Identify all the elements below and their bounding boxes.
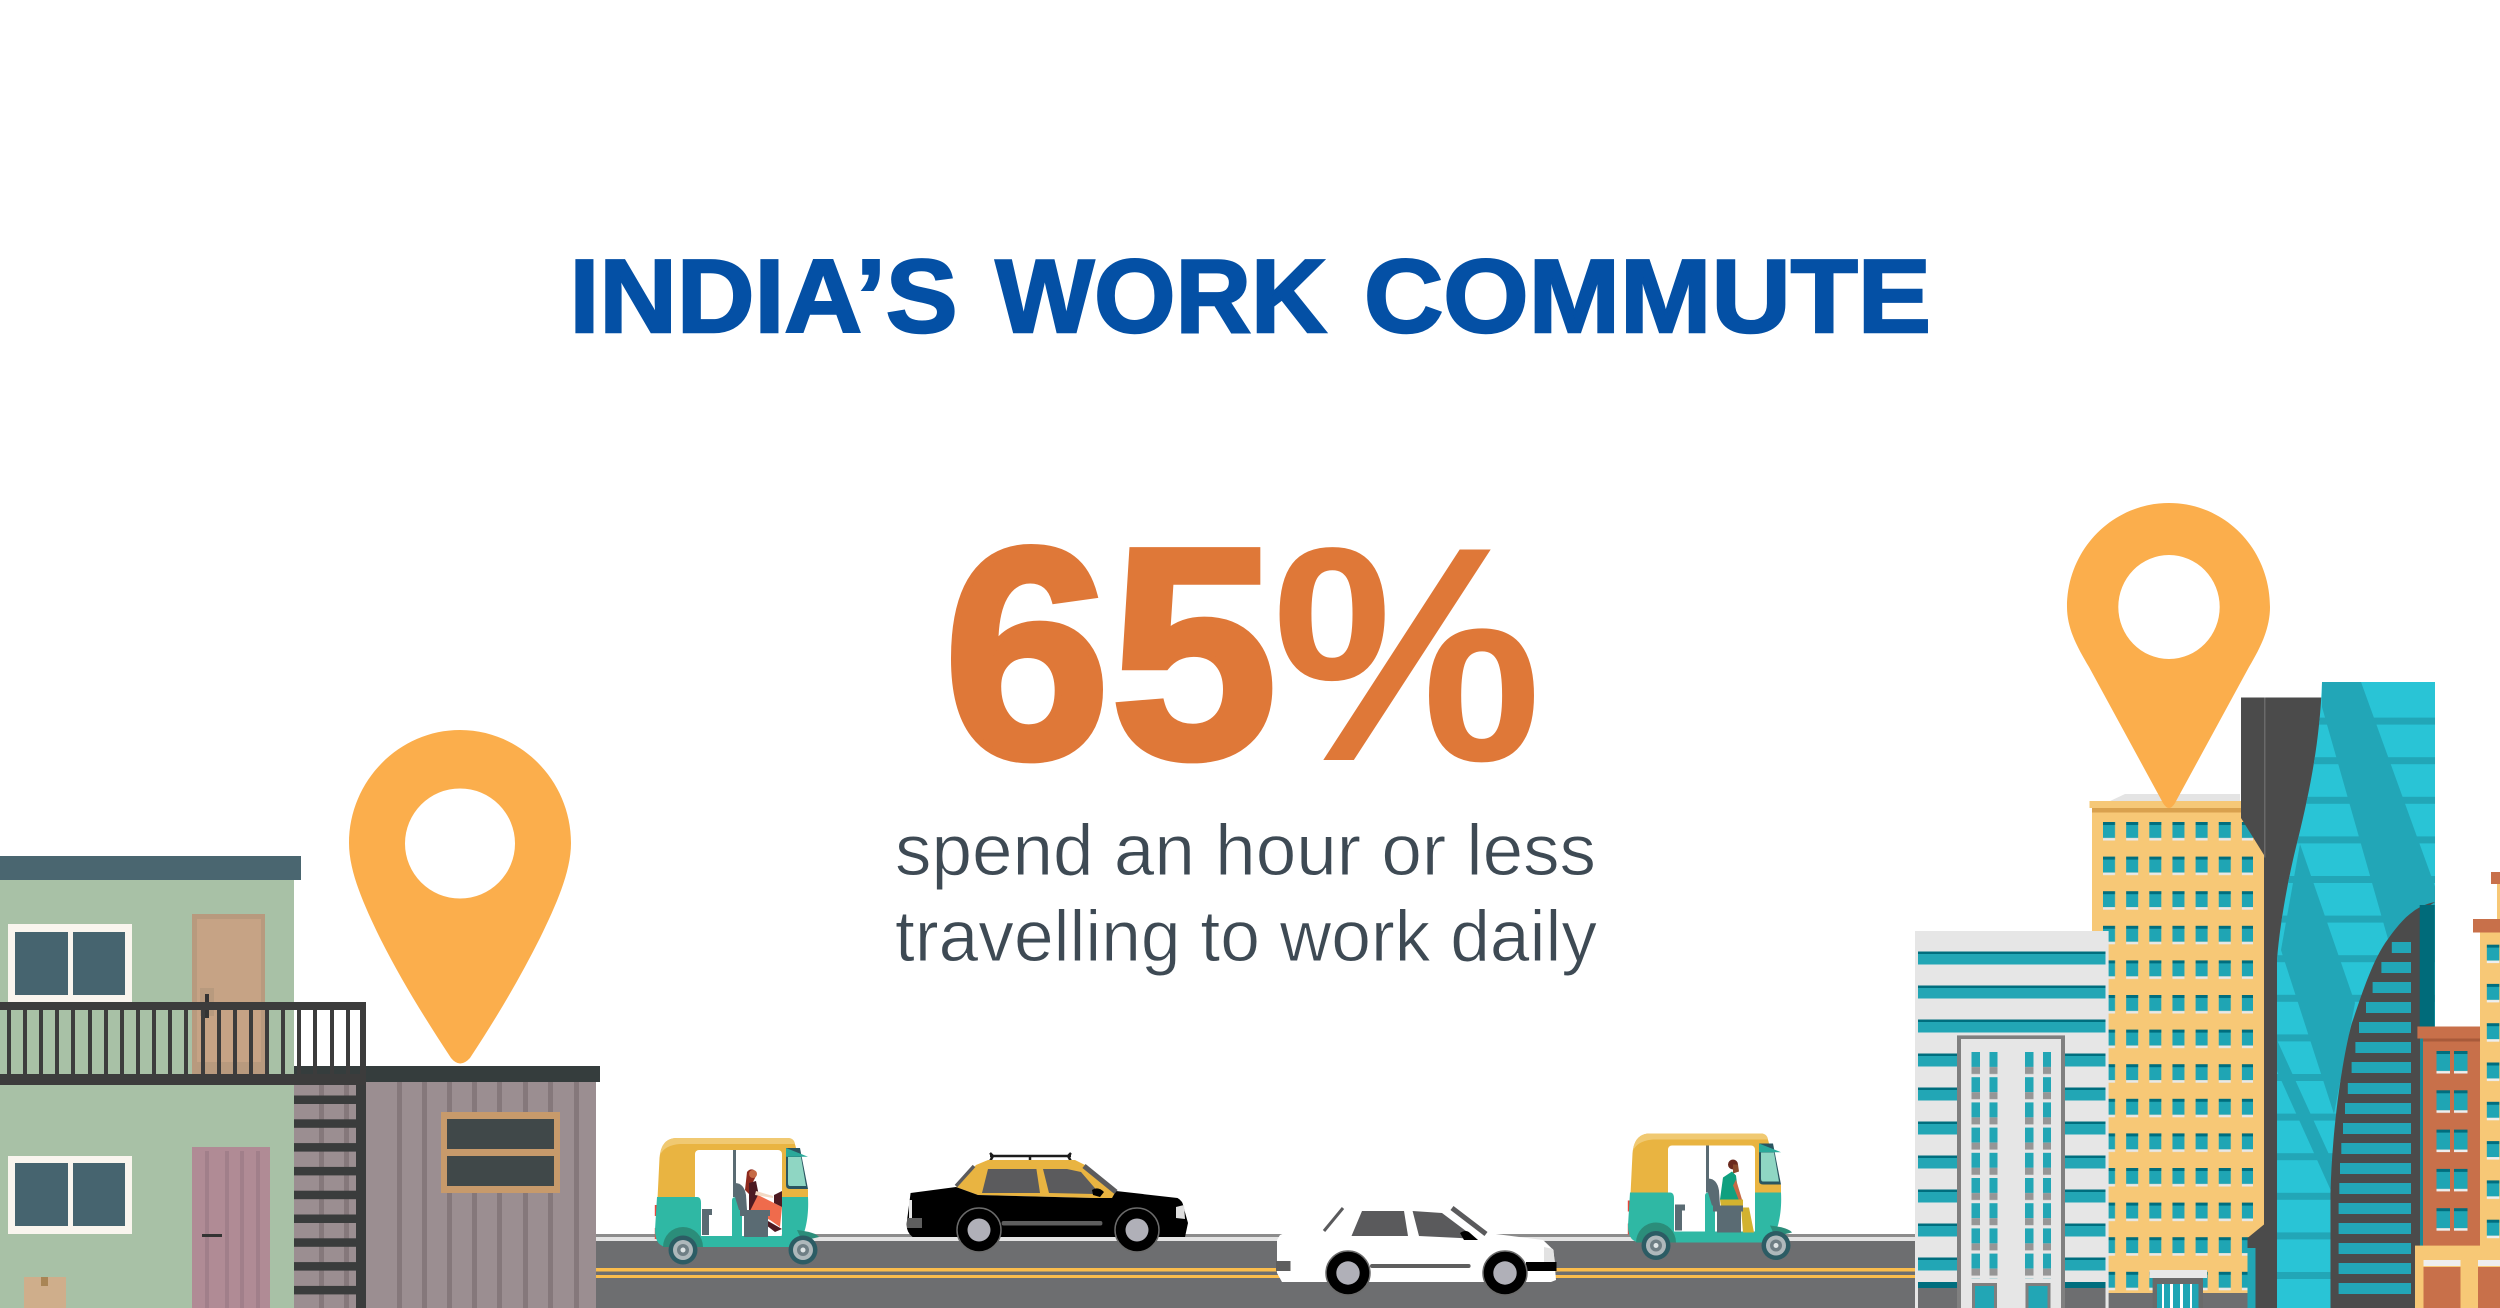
- parcel box: [24, 1277, 66, 1308]
- shed window: [441, 1112, 560, 1193]
- statistic description: travelling to work daily: [895, 897, 1597, 977]
- title: INDIA’S: [570, 239, 958, 355]
- brick building: [2417, 1026, 2480, 1251]
- arched dark facade: [2330, 902, 2435, 1308]
- white striped building: [1915, 931, 2109, 1308]
- yellow low-rise on right edge: [2415, 872, 2500, 1308]
- icon: left location pin: [349, 730, 571, 1064]
- road: [596, 1234, 2300, 1308]
- big statistic: 65%: [944, 483, 1542, 825]
- black and yellow taxi: [907, 1153, 1188, 1252]
- house: green two-storey home: [0, 856, 301, 1308]
- staircase wall: [294, 1082, 366, 1308]
- big statistic: 65%: 65: [944, 485, 1277, 821]
- shed roof: [294, 1066, 600, 1082]
- statistic description: [895, 811, 1597, 977]
- shed: corrugated grey building: [294, 1066, 600, 1308]
- icon: right location pin: [2067, 503, 2270, 808]
- lower door: [192, 1147, 270, 1308]
- balcony railing: [0, 1002, 366, 1085]
- statistic description: spend an hour or less: [895, 811, 1596, 891]
- driver: [1720, 1160, 1754, 1232]
- house roof: [0, 856, 301, 880]
- central entrance block: [1957, 1035, 2065, 1308]
- curved teal glass tower: [2270, 682, 2440, 1308]
- title: WORK: [996, 239, 1326, 355]
- passenger: [745, 1169, 782, 1232]
- upper door: [192, 914, 265, 1074]
- auto-rickshaw with male driver: [1628, 1134, 1792, 1260]
- big statistic: 65%: %: [1272, 483, 1542, 825]
- white car: [1276, 1207, 1556, 1295]
- yellow office tower: [2090, 794, 2268, 1308]
- title: [570, 239, 1931, 355]
- title: COMMUTE: [1364, 239, 1931, 355]
- lower window: [8, 1156, 132, 1234]
- tower entrance: [2150, 1270, 2207, 1308]
- upper window: [8, 924, 132, 1002]
- auto-rickshaw with woman passenger: [655, 1138, 819, 1264]
- dark tower: [2241, 698, 2325, 1308]
